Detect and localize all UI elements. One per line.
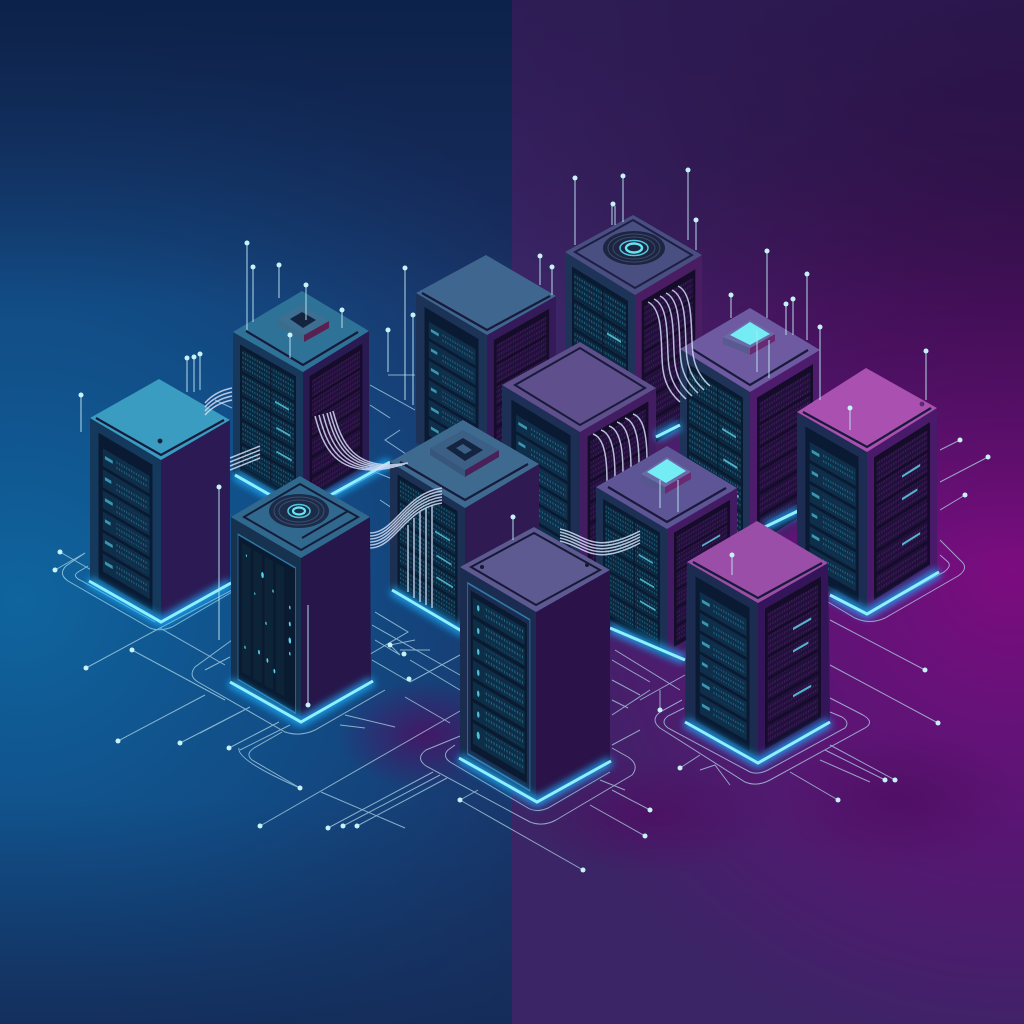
icon: glowing chip on rack 10 <box>641 457 691 494</box>
server rack: centre <box>502 342 680 582</box>
icon: glowing chip on rack 6 <box>723 320 775 355</box>
server rack: front left with fan <box>230 476 373 722</box>
floor shadows <box>338 680 1020 875</box>
server rack: back centre <box>416 255 556 485</box>
antenna lines <box>81 170 926 705</box>
background: purple right half <box>512 0 1024 1024</box>
cables: rack 5 ribbon <box>593 414 647 482</box>
server rack: front centre <box>459 527 611 802</box>
circuit trace end dots <box>52 438 990 872</box>
server rack: right purple <box>797 368 939 614</box>
background: blue left half <box>0 0 512 1024</box>
server rack: back left with chip <box>233 291 390 512</box>
cables: rack 2 to rack 8 <box>315 411 408 470</box>
cables: rack 11 to rack 10 <box>560 529 640 555</box>
cables: rack 8 ribbon <box>370 488 442 608</box>
antenna tip dots <box>78 168 928 708</box>
cables: rack 4 ribbon <box>648 286 710 402</box>
server rack: far left teal <box>89 379 231 622</box>
icon: cooling fan <box>269 494 329 528</box>
server rack: lower right-centre with glowing chip <box>596 446 737 660</box>
server rack: centre left with socket <box>390 420 539 636</box>
server rack: back right with fan <box>565 215 702 465</box>
server rack: front right purple <box>685 521 830 763</box>
server rack: upper right with glowing chip <box>680 308 820 557</box>
cables: rack 1 to rack 2 <box>205 388 260 470</box>
icon: chip on rack 2 <box>277 305 329 342</box>
icon: socket on rack 8 <box>430 430 499 477</box>
circuit traces on the floor <box>55 375 988 870</box>
icon: cooling fan <box>603 231 665 265</box>
